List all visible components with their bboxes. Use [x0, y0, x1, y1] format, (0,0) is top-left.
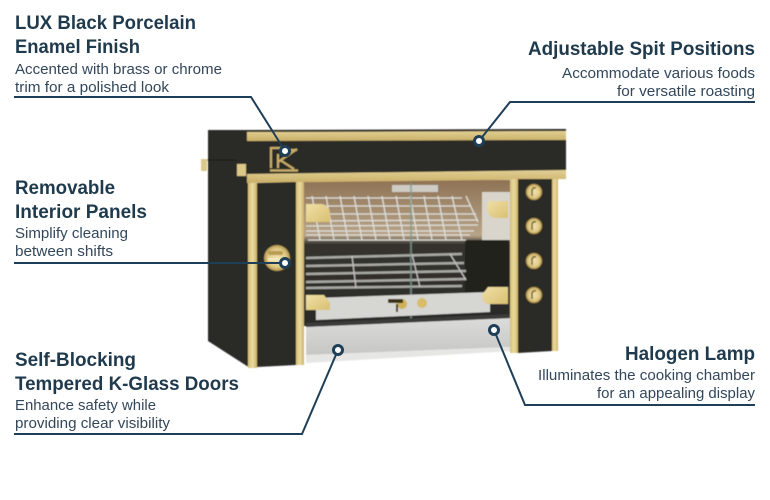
callout: LUX Black Porcelain Enamel Finish: trim for a polished look: [15, 80, 170, 96]
callout: Halogen Lamp: for an appealing display: [597, 386, 756, 402]
leader line: [14, 97, 285, 151]
leader line: [479, 102, 755, 141]
callout: Halogen Lamp: [490, 326, 756, 405]
side panel: [208, 130, 250, 368]
callout: Removable Interior Panels: Interior Panels: [15, 201, 147, 223]
heading: Removable: [15, 177, 115, 199]
heading: Self-Blocking: [15, 349, 136, 371]
marker: [280, 146, 290, 156]
marker: [474, 136, 484, 146]
callout: Self-Blocking Tempered K-Glass Doors: Tempered K-Glass Doors: [15, 373, 239, 395]
marker: [490, 326, 498, 334]
upper rack: [306, 196, 478, 240]
callout: LUX Black Porcelain Enamel Finish: [14, 12, 290, 156]
callout: Adjustable Spit Positions: [474, 38, 755, 146]
leader line: [14, 350, 338, 434]
heading: LUX Black Porcelain: [15, 12, 196, 34]
control knobs: [526, 184, 542, 303]
door hinges: [306, 201, 508, 310]
upper lamp fixture: [392, 185, 438, 192]
callout: Self-Blocking Tempered K-Glass Doors: [14, 346, 342, 434]
right pillar: [510, 179, 558, 353]
top gold trim: [247, 131, 566, 141]
heading: Halogen Lamp: [625, 343, 755, 365]
glass divider: [410, 183, 412, 325]
logo badge: [270, 148, 298, 170]
description: Accented with brass or chrome: [15, 62, 222, 78]
right chamber shadow: [465, 240, 509, 296]
marker: [334, 346, 342, 354]
drawer: [306, 314, 512, 363]
door handles: [388, 298, 427, 312]
callout: LUX Black Porcelain Enamel Finish: Enamel Finish: [15, 36, 140, 58]
right rear panels: [482, 192, 510, 240]
description: Accommodate various foods: [562, 66, 755, 82]
callout: Self-Blocking Tempered K-Glass Doors: providing clear visibility: [15, 416, 171, 432]
left side hinges: [201, 159, 246, 176]
description: Illuminates the cooking chamber: [538, 368, 755, 384]
left dial: [264, 245, 290, 271]
lower rack: [306, 254, 466, 288]
callout: Removable Interior Panels: between shifts: [15, 244, 113, 260]
lower gold trim: [247, 170, 566, 183]
rotisserie machine: [201, 129, 566, 368]
top black fascia: [248, 129, 566, 176]
marker: [280, 258, 290, 268]
callout: Adjustable Spit Positions: for versatile roasting: [617, 84, 755, 100]
left pillar: [248, 182, 304, 368]
heading: Adjustable Spit Positions: [528, 38, 755, 60]
cooking chamber: [304, 180, 511, 326]
leader line: [494, 330, 755, 405]
leader line: [14, 262, 285, 264]
drip tray: [316, 292, 490, 320]
callout: Removable Interior Panels: [14, 177, 290, 268]
description: Enhance safety while: [15, 398, 156, 414]
description: Simplify cleaning: [15, 226, 128, 242]
